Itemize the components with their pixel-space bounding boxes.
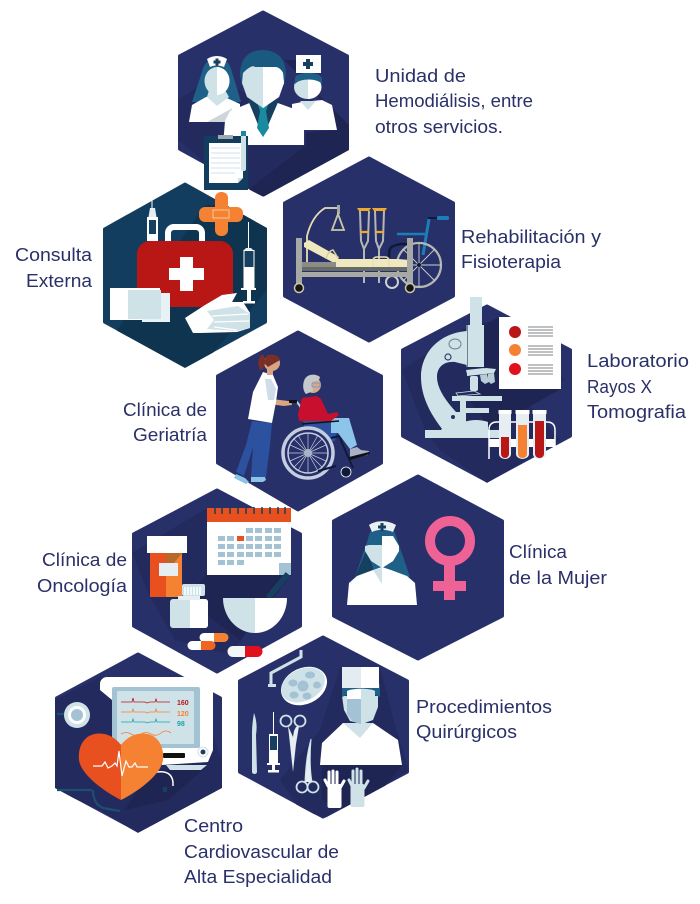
icon: right syringe [241, 222, 256, 304]
panel: Unidad de Hemodiálisis [178, 12, 349, 197]
icon: bright red dot [509, 363, 521, 375]
icon: clipboard [204, 131, 248, 190]
icon: patient monitor [100, 677, 213, 792]
icon: mortar [223, 574, 288, 633]
icon: doctor [223, 50, 304, 145]
icon: nurse [347, 521, 417, 605]
icon: surgeon [320, 667, 402, 765]
icon: scalpel [252, 713, 257, 774]
label: Laboratorio Rayos X Tomografia: Laboratorio [587, 350, 689, 371]
hexagon background [284, 158, 454, 341]
text: 120 reading: 120 [177, 711, 189, 718]
label: Laboratorio Rayos X Tomografia: Rayos X [587, 376, 652, 397]
icon: gloves [325, 769, 368, 808]
label: Clínica de la Mujer: Clínica [509, 541, 568, 562]
icon: surgical lamp [268, 650, 333, 712]
icon: red dot [509, 326, 521, 338]
icon: surgical syringe [267, 712, 280, 772]
icon: trapeze bar [307, 205, 344, 262]
icon: test tubes [489, 410, 555, 459]
icon: adhesive bandage cross [199, 192, 243, 236]
label: Consulta Externa: Consulta [15, 244, 93, 265]
label: Consulta Externa [15, 244, 93, 291]
label: Unidad de Hemodiálisis [375, 65, 533, 137]
label: Rehabilitación y Fisioterapia [461, 226, 602, 272]
label: Consulta Externa: Externa [26, 270, 93, 291]
panel: Consulta Externa [104, 184, 267, 368]
panel: Clínica de la Mujer [334, 476, 502, 659]
icon: bandage [110, 288, 170, 322]
label: Rehabilitación y Fisioterapia: Fisioterapia [461, 251, 562, 272]
label: Clínica de Geriatría: Geriatría [133, 424, 208, 445]
label: Centro Cardiovascular de Alta Especialidad [184, 815, 339, 887]
icon: first aid case [137, 227, 233, 307]
label: Clínica de Oncología [37, 549, 128, 596]
chart: ECG traces [121, 698, 171, 736]
icon: caregiver [234, 354, 292, 484]
hexagon background [402, 306, 570, 481]
label: Clínica de la Mujer: de la Mujer [509, 567, 607, 588]
icon: nurse right [292, 55, 337, 130]
label: Procedimientos Quirúrgicos: Procedimientos [416, 696, 552, 717]
text: 160 reading: 160 [177, 700, 189, 707]
label: Clínica de Geriatría [123, 399, 208, 445]
hexagon background [134, 490, 300, 672]
label: Laboratorio Rayos X Tomografia [587, 350, 689, 422]
hexagon background [180, 12, 348, 195]
label: Centro Cardiovascular de Alta Especialidad: Centro [184, 815, 243, 836]
label: Unidad de Hemodiálisis: Hemodiálisis, entre [375, 90, 533, 111]
icon: wheelchair [386, 216, 449, 288]
panel: Clínica de Oncología [132, 490, 300, 672]
icon: pill bottle [147, 536, 187, 597]
label: Clínica de Geriatría: Clínica de [123, 399, 207, 420]
icon: nurse left [189, 56, 241, 122]
icon: orange dot [509, 344, 521, 356]
icon: medicine jar [170, 584, 208, 628]
icon: left syringe [147, 188, 158, 241]
label: Centro Cardiovascular de Alta Especialidad: Alta Especialidad [184, 866, 332, 887]
icon: microscope [421, 297, 502, 438]
hexagon background [56, 654, 220, 831]
panel: Rehabilitación y Fisioterapia [284, 158, 454, 341]
icon: report sheet [499, 317, 561, 389]
label: Procedimientos Quirúrgicos [416, 696, 552, 742]
hexagon background [218, 332, 382, 510]
icon: glove [185, 293, 250, 333]
icon: crutches [357, 208, 387, 283]
panel: Clínica de Geriatría [218, 332, 382, 510]
label: Clínica de la Mujer [509, 541, 607, 588]
hexagon background [334, 476, 502, 659]
icon: stethoscope lines [57, 714, 120, 811]
label: Clínica de Oncología: Oncología [37, 575, 128, 596]
label: Centro Cardiovascular de Alta Especialidad: Cardiovascular de [184, 841, 339, 862]
icon: capsules [188, 633, 263, 657]
panel: Laboratorio [402, 297, 570, 483]
icon: wheelchair with patient [283, 375, 370, 478]
label: Rehabilitación y Fisioterapia: Rehabilitación y [461, 226, 602, 247]
icon: heart [79, 733, 163, 800]
panel: Procedimientos Quirúrgicos [240, 637, 409, 819]
label: Unidad de Hemodiálisis: otros servicios. [375, 116, 503, 137]
icon: hospital bed [294, 238, 414, 292]
label: Procedimientos Quirúrgicos: Quirúrgicos [416, 721, 517, 742]
text: 98 reading: 98 [177, 721, 185, 728]
label: Laboratorio Rayos X Tomografia: Tomografia [587, 401, 687, 422]
icon: calendar [207, 507, 291, 575]
hexagon background [104, 184, 266, 366]
icon: scissors [280, 716, 306, 772]
icon: stethoscope chest piece [64, 702, 90, 728]
hexagon background [240, 637, 408, 817]
label: Unidad de Hemodiálisis: Unidad de [375, 65, 466, 86]
label: Clínica de Oncología: Clínica de [42, 549, 127, 570]
icon: female symbol [430, 521, 470, 600]
panel: Centro Cardiovascular [55, 654, 222, 833]
icon: forceps [296, 739, 318, 792]
